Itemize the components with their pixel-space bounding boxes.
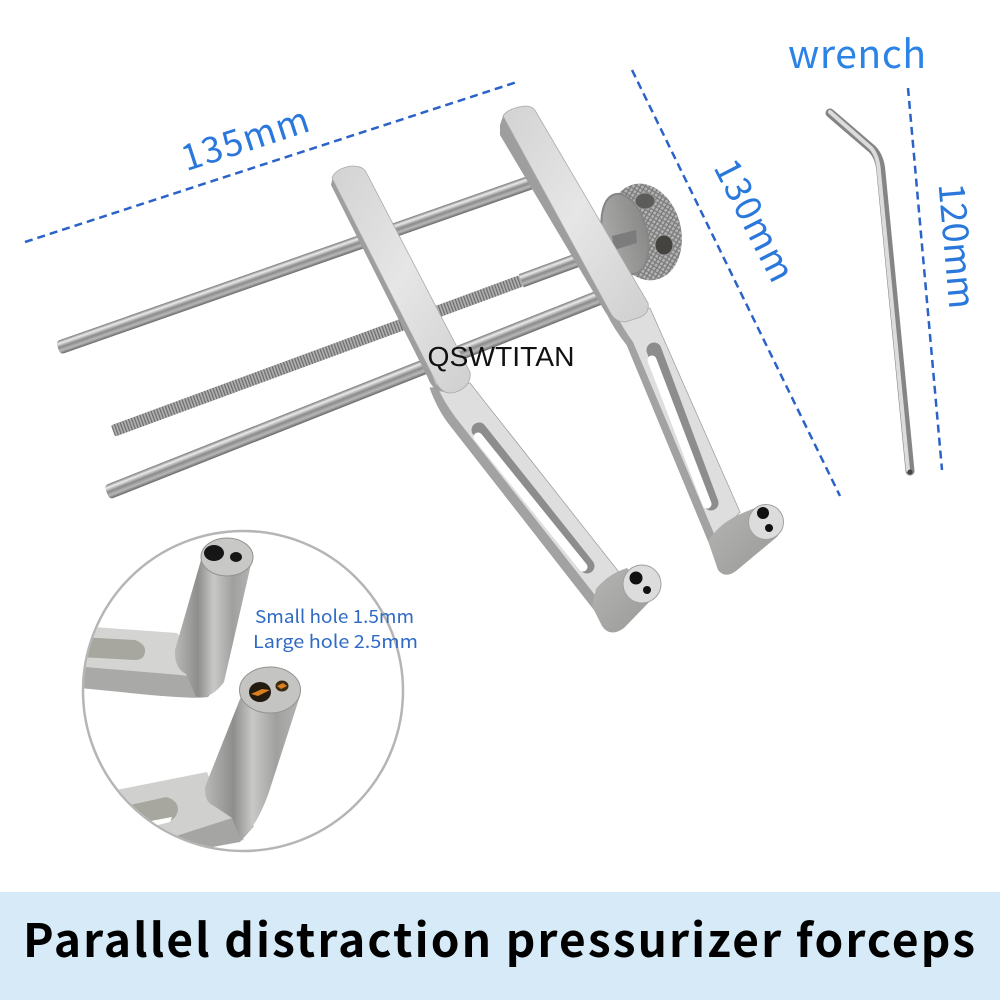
forceps: knurled knob — [594, 176, 692, 288]
panel: close-up of tips — [80, 531, 418, 852]
tube tip — [592, 568, 655, 633]
banner: bottom title — [0, 892, 1000, 1000]
threaded screw rod — [111, 252, 585, 438]
forceps: left arm — [331, 166, 661, 633]
close-up: lower tip — [116, 667, 300, 852]
watermark: QSWTITAN: QSWTITAN — [428, 341, 574, 372]
forceps: right arm — [500, 106, 784, 575]
forceps: rods and threaded screw — [56, 175, 605, 500]
dimension: 135mm length: 135mm — [174, 92, 315, 182]
slot — [654, 350, 711, 503]
slot — [479, 430, 587, 566]
callout: hole sizes — [253, 603, 418, 654]
icon: wrench tool — [830, 112, 912, 474]
dimension: 120mm wrench length: 120mm — [928, 181, 990, 311]
lower guide rod — [104, 289, 605, 500]
tube tip — [708, 506, 778, 575]
bar handle — [331, 176, 444, 392]
dimension: 135mm length — [25, 82, 517, 242]
heading: wrench: wrench — [788, 24, 926, 80]
banner: bottom title: Parallel distraction pressurizer forceps — [23, 905, 975, 971]
bar handle — [500, 116, 618, 320]
dimension: 130mm length: 130mm — [703, 149, 809, 290]
callout: hole sizes: Large hole 2.5mm — [253, 628, 418, 654]
upper guide rod — [56, 175, 536, 355]
dimension: 120mm wrench length — [908, 88, 990, 470]
dimension: 130mm length — [632, 70, 840, 496]
callout: hole sizes: Small hole 1.5mm — [255, 603, 414, 629]
close-up: upper tip — [80, 538, 253, 698]
